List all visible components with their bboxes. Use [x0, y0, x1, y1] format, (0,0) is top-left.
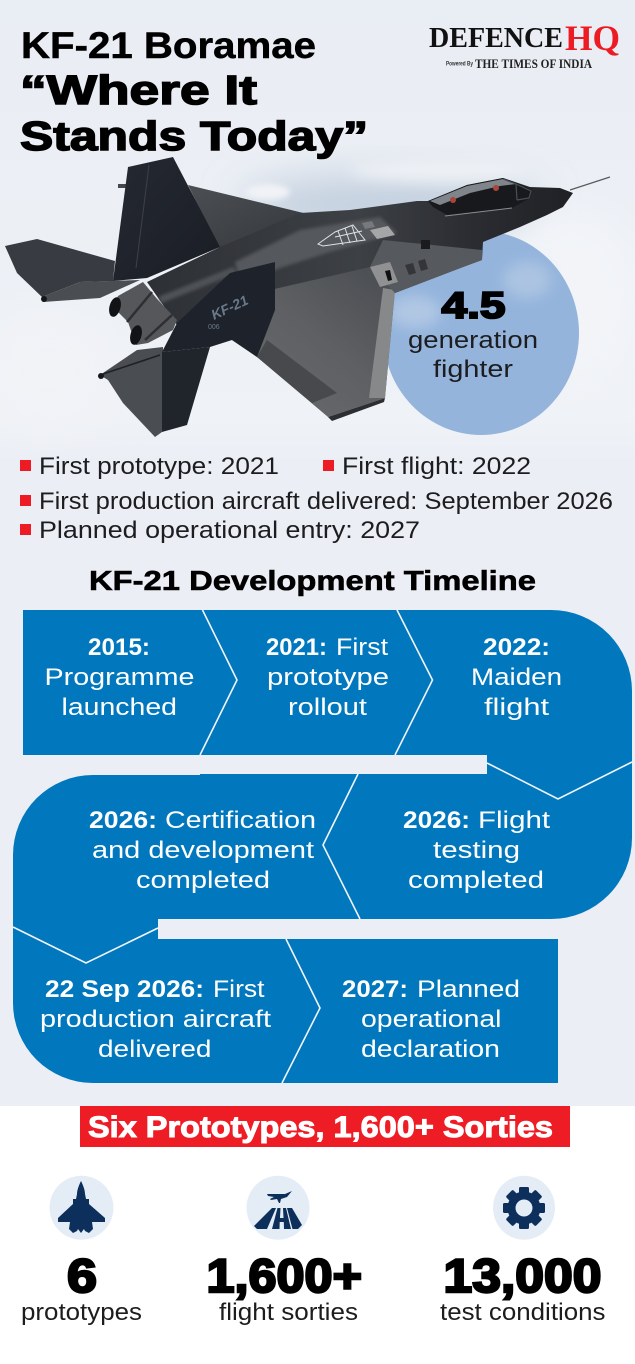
step: 2022: 2022: [483, 634, 550, 661]
step: 2021: prototype [267, 664, 389, 691]
step: 2021 [266, 634, 389, 721]
step: 2015 [44, 634, 194, 721]
callout label: fighter [433, 356, 513, 383]
callout circle: 4.5 generation fighter [383, 231, 579, 435]
step: 2022: flight [484, 694, 549, 721]
callout number: 4.5 [442, 285, 506, 326]
stat label: prototypes [21, 1299, 142, 1326]
fact: operational entry: Planned operational entry: 2027 [39, 517, 420, 544]
stat label: flight sorties [219, 1299, 358, 1326]
cloud sky backdrop [0, 159, 635, 430]
step: 2021: First [336, 634, 388, 661]
step: 2015: Programme [44, 664, 194, 691]
step: 2026 certification: and development [92, 837, 314, 864]
step: 2015: 2015: [88, 634, 150, 661]
icon: plane over runway [246, 1176, 310, 1240]
callout label [408, 327, 538, 383]
step: 2026 certification: Certification [165, 807, 316, 834]
tail marking: KF-21 [209, 292, 251, 323]
stat: prototypes [21, 1176, 142, 1326]
step: 22 Sep 2026: First [213, 976, 265, 1003]
title: KF-21 Boramae [21, 25, 316, 66]
fact: first flight: First flight: 2022 [342, 453, 531, 480]
step: 2026 certification: 2026: [89, 807, 157, 834]
step: 2026 flight testing: completed [408, 867, 544, 894]
stats section background [0, 1106, 635, 1364]
step: 2027: Planned [417, 976, 520, 1003]
canopy [428, 178, 532, 216]
icon: fighter jet [50, 1176, 114, 1240]
logo: Defence HQ [429, 18, 620, 71]
step: 2021: rollout [288, 694, 367, 721]
stats banner: Six Prototypes, 1,600+ Sorties [88, 1111, 553, 1144]
step: 2022 [471, 634, 562, 721]
stat: flight sorties [206, 1176, 362, 1326]
logo: Defence HQ: Powered By [446, 62, 474, 68]
step: 2027: 2027: [342, 976, 408, 1003]
step: 2021: 2021: [266, 634, 327, 661]
fuselage panels [362, 221, 395, 239]
fuselage [147, 178, 573, 325]
fuselage emblem [318, 225, 365, 246]
vertical tail, upper [113, 157, 220, 281]
timeline chevron dividers [13, 610, 632, 1083]
timeline serpentine [13, 610, 632, 1083]
side vents [405, 259, 428, 275]
step: 2026 flight testing: 2026: [403, 807, 470, 834]
title: Stands Today” [20, 113, 368, 159]
intake side panel [370, 240, 482, 293]
vertical tail, lower [162, 262, 275, 357]
engine nozzles [107, 282, 177, 346]
step: 2026 certification [89, 807, 316, 894]
step: 2026 certification: completed [136, 867, 270, 894]
step: 2026 flight testing: Flight [478, 807, 550, 834]
logo: Defence HQ: THE TIMES OF INDIA [475, 56, 593, 71]
tail number: 006 [208, 324, 220, 331]
illustration: KF-21 jet [5, 157, 610, 437]
stat label: test conditions [440, 1299, 606, 1326]
callout label: generation [408, 327, 538, 354]
stat number: 13,000 [444, 1249, 602, 1302]
step: 2022: Maiden [471, 664, 562, 691]
lower tailplane [98, 347, 210, 437]
fact: first prototype: First prototype: 2021 [39, 453, 279, 480]
step: 2027: operational [361, 1006, 502, 1033]
upper fuselage panels [235, 217, 397, 285]
step: 22 Sep 2026: delivered [98, 1036, 212, 1063]
title [20, 25, 368, 159]
intake panel with slot [370, 262, 398, 287]
nose pitot [570, 177, 610, 190]
main wing, upper [188, 185, 320, 250]
step: 22 Sep 2026: production aircraft [40, 1006, 271, 1033]
step: 2015: launched [62, 694, 177, 721]
step: 2026 flight testing: testing [433, 837, 520, 864]
step: 2027 [342, 976, 520, 1063]
timeline band [13, 610, 632, 1083]
stat number: 6 [67, 1249, 97, 1302]
step: 2026 flight testing [403, 807, 550, 894]
left tailplane [5, 239, 140, 302]
timeline heading: KF-21 Development Timeline [89, 565, 536, 596]
stat: test conditions [440, 1176, 606, 1326]
step: 22 Sep 2026 [40, 976, 271, 1063]
stat number: 1,600+ [206, 1249, 362, 1302]
lower wing [232, 267, 395, 421]
step: 2027: declaration [361, 1036, 500, 1063]
key facts list [20, 453, 613, 544]
step: 22 Sep 2026: 22 Sep 2026: [45, 976, 204, 1003]
logo: Defence HQ: HQ [565, 18, 620, 58]
icon: gear [493, 1176, 555, 1240]
title: “Where It [20, 67, 257, 113]
fact: first production aircraft: First production aircraft delivered: September 2026 [39, 488, 613, 515]
logo: Defence HQ: DEFENCE [429, 22, 563, 54]
small sensor window [421, 240, 430, 249]
